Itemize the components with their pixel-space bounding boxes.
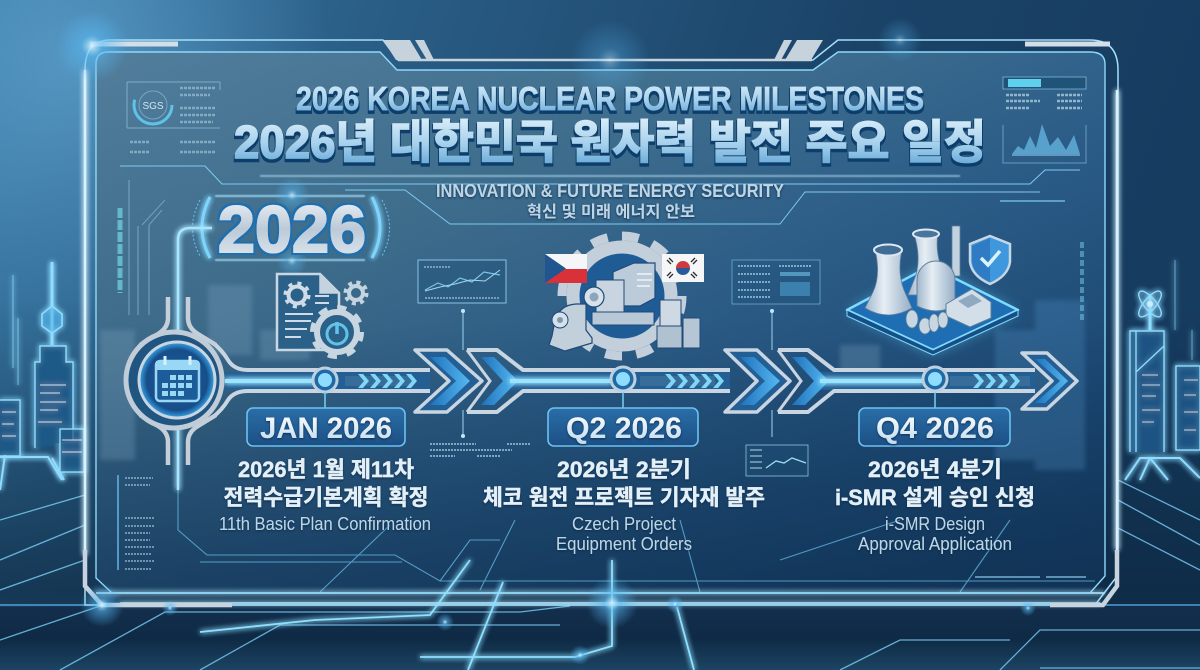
left outer city skyline [0, 262, 84, 490]
timeline node q2 [611, 367, 724, 408]
hud widget: right vertical bars [1080, 242, 1084, 320]
timeline rail 1 [213, 343, 430, 417]
bottom bright circuit traces [200, 560, 694, 670]
description: jan [219, 457, 431, 534]
timeline node jan [313, 368, 417, 408]
corner glows [56, 10, 922, 627]
description: q2: Czech Project [572, 514, 676, 534]
outer frame outline [85, 40, 1118, 605]
subtitle [436, 181, 784, 221]
year badge 2026 [192, 177, 390, 277]
hud widget: top left gauge: SGS [142, 101, 164, 112]
description: q2 [483, 457, 765, 554]
connector: badge to hub [178, 228, 212, 335]
description: q4: i-SMR 설계 승인 신청 [835, 485, 1035, 510]
icon: czech project gear and machinery [549, 236, 700, 356]
description: q4: 2026년 4분기 [868, 457, 1002, 482]
title: english: 2026 KOREA NUCLEAR POWER MILESTONES [296, 80, 924, 117]
date pill: q4 2026 [859, 408, 1010, 446]
icon: czech flag [545, 254, 587, 283]
icon: document with gears [277, 274, 366, 356]
hud widget: top right readout [1003, 77, 1086, 108]
milestone q4 [835, 408, 1035, 554]
description: q4: i-SMR Design [885, 514, 985, 534]
description: q2: 2026년 2분기 [557, 457, 691, 482]
timeline rail 3 [778, 350, 1035, 412]
milestone jan [219, 408, 431, 534]
mini chart panel: trend [418, 260, 506, 350]
description: q4 [835, 457, 1035, 554]
subtitle: INNOVATION & FUTURE ENERGY SECURITY [436, 181, 784, 201]
panel lower circuits [178, 440, 1095, 592]
blurred panel skyline [100, 285, 1085, 470]
glowing panel base lines [96, 593, 1105, 603]
timeline hub calendar [126, 297, 222, 490]
frame panel [96, 52, 1105, 593]
description: q4: Approval Application [858, 534, 1012, 554]
milestone q2 [483, 408, 765, 554]
mini data panel: under arrow 1 [430, 410, 530, 456]
decorative title divider [120, 166, 1080, 224]
hud widget: top left gauge [127, 82, 220, 152]
icon: korean flag [662, 254, 704, 282]
bottom right status bar [975, 576, 1086, 578]
description: jan: 11th Basic Plan Confirmation [219, 514, 431, 534]
description: q2: 체코 원전 프로젝트 기자재 발주 [483, 485, 765, 510]
arrow 2 [725, 350, 790, 412]
description: q2: Equipment Orders [556, 534, 692, 554]
floor circuit lines [0, 480, 1200, 670]
year badge 2026: 2026 [218, 192, 366, 266]
subtitle: 혁신 및 미래 에너지 안보 [527, 203, 695, 221]
mini data panel: above arrow 2 [732, 260, 820, 350]
arrow 1 [415, 350, 482, 412]
timeline node q4 [923, 367, 1020, 408]
description: jan: 전력수급기본계획 확정 [224, 485, 428, 510]
timeline rail 2 [467, 350, 730, 412]
description: jan: 2026년 1월 제11차 [238, 457, 414, 482]
date pill: jan 2026: JAN 2026 [260, 412, 392, 445]
arrow 3 [1022, 353, 1077, 409]
date pill: q2 2026: Q2 2026 [566, 412, 682, 445]
date pill: q2 2026 [548, 408, 698, 446]
hud widget: left vertical bars [120, 180, 165, 315]
title: korean: 2026년 대한민국 원자력 발전 주요 일정 [234, 116, 986, 168]
icon: shield with check [970, 236, 1010, 284]
hud widget: top right bar chart [1003, 124, 1086, 163]
icon: i-SMR plant platform [847, 226, 1018, 355]
date pill: q4 2026: Q4 2026 [876, 412, 994, 445]
hud widget: lower left data text [118, 475, 155, 570]
right outer city skyline [1125, 260, 1200, 480]
mini chart panel: under arrow 2 [746, 410, 808, 476]
bottom light points [162, 577, 1036, 665]
